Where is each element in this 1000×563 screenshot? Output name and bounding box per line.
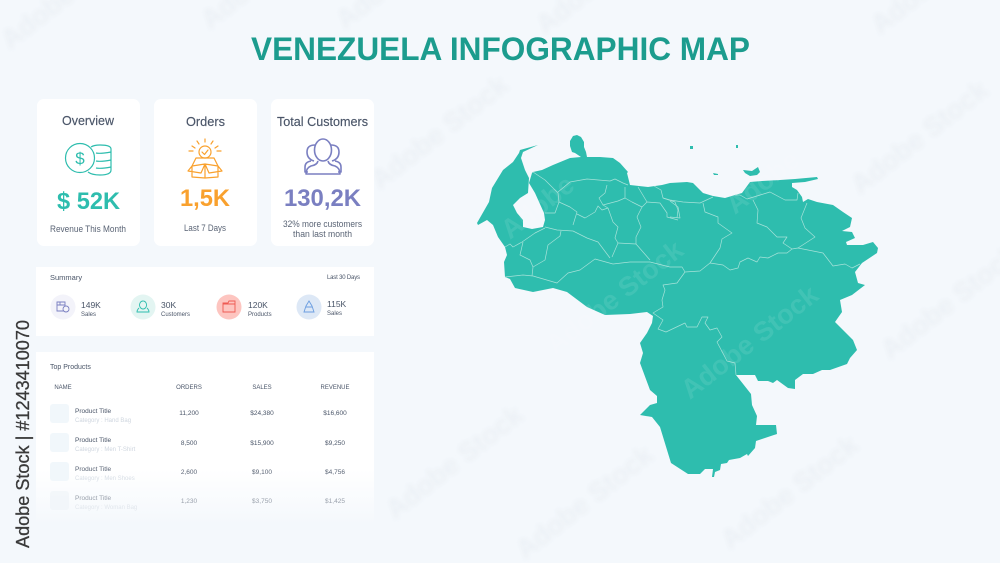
label: revenue: Revenue This Month	[50, 224, 126, 234]
row 4: $3,750	[252, 498, 272, 505]
title: VENEZUELA INFOGRAPHIC MAP	[251, 31, 750, 67]
stat: sales: 149K	[81, 300, 101, 310]
row 3: 2,600	[181, 469, 198, 476]
stat: products	[216, 294, 272, 320]
islands	[690, 145, 760, 176]
row 3	[50, 462, 345, 482]
stat: products: Products	[248, 312, 272, 318]
row 4	[50, 491, 345, 511]
row 4: Product Title	[75, 495, 112, 502]
watermark overlay on map: Adobe Stock	[540, 234, 690, 360]
row 2: Category : Men T-Shirt	[75, 447, 136, 453]
map landmass	[477, 135, 878, 477]
icon: people group	[305, 139, 341, 174]
map of Venezuela	[477, 135, 878, 477]
row 1	[50, 404, 347, 424]
table header: ORDERS	[176, 385, 202, 391]
table header: SALES	[252, 385, 272, 391]
stat: sales: Sales	[81, 312, 96, 318]
watermark overlay on map: Adobe Stock	[675, 279, 825, 405]
state borders	[505, 172, 860, 375]
row 3: $4,756	[325, 469, 345, 476]
stat: customers: Customers	[161, 312, 190, 318]
watermark background layer: Adobe Stock	[510, 439, 660, 563]
adobe stock vertical credit: Adobe Stock | #1243410070	[13, 320, 33, 548]
row 1: 11,200	[179, 410, 199, 417]
label: orders: Last 7 Days	[184, 223, 226, 233]
stat: products: 120K	[248, 300, 268, 310]
row 4: Category : Woman Bag	[75, 505, 137, 511]
watermark overlay on map: Adobe	[495, 169, 580, 245]
table header: NAME	[54, 385, 72, 391]
heading: orders: Orders	[186, 114, 225, 129]
row 3: Category : Men Shoes	[75, 476, 135, 482]
stat: sales 2	[296, 294, 347, 320]
row 3: $9,100	[252, 469, 272, 476]
heading: total customers: Total Customers	[277, 114, 368, 129]
watermark overlay on map: Adobe	[720, 144, 805, 220]
stat: sales	[50, 294, 101, 320]
heading: overview: Overview	[62, 113, 115, 128]
watermark background layer: Adobe Stock	[845, 74, 995, 200]
panel: orders card	[154, 99, 257, 246]
stat: customers: 30K	[161, 300, 176, 310]
row 4: $1,425	[325, 498, 345, 505]
watermark overlay on map	[495, 144, 825, 405]
value: revenue: $ 52K	[57, 188, 121, 215]
heading: top products: Top Products	[50, 364, 91, 371]
table header: REVENUE	[320, 385, 350, 391]
panel: customers card	[271, 99, 374, 246]
label: period: Last 30 Days	[327, 275, 360, 281]
row 3: Product Title	[75, 466, 112, 473]
row 1: $24,380	[250, 410, 274, 417]
row 2: 8,500	[181, 440, 198, 447]
panel: top products table	[36, 352, 374, 524]
watermark background layer: Adobe Stock	[365, 69, 515, 195]
value: orders: 1,5K	[180, 185, 231, 212]
row 4: 1,230	[181, 498, 198, 505]
row 1: Product Title	[75, 408, 112, 415]
panel: overview card	[37, 99, 140, 246]
watermark background layer: Adobe Stock	[715, 429, 865, 555]
icon: coins: $	[75, 149, 85, 168]
value: customers: 130,2K	[284, 185, 362, 212]
watermark background layer: Adobe Stock	[380, 399, 530, 525]
heading: summary: Summary	[50, 273, 82, 282]
table header	[54, 385, 350, 391]
stat: sales 2: Sales	[327, 311, 342, 317]
row 1: $16,600	[323, 410, 347, 417]
icon: box with check	[188, 139, 222, 178]
row 2: $15,900	[250, 440, 274, 447]
row 1: Category : Hand Bag	[75, 418, 131, 424]
label: customers second line: than last month	[293, 229, 352, 239]
icon: coins	[66, 144, 111, 175]
label: customers: 32% more customers	[283, 219, 362, 229]
row 2: $9,250	[325, 440, 345, 447]
panel: summary	[36, 267, 374, 336]
row 2: Product Title	[75, 437, 112, 444]
row 2	[50, 433, 345, 453]
stat: sales 2: 115K	[327, 299, 347, 309]
stat: customers	[130, 294, 190, 320]
